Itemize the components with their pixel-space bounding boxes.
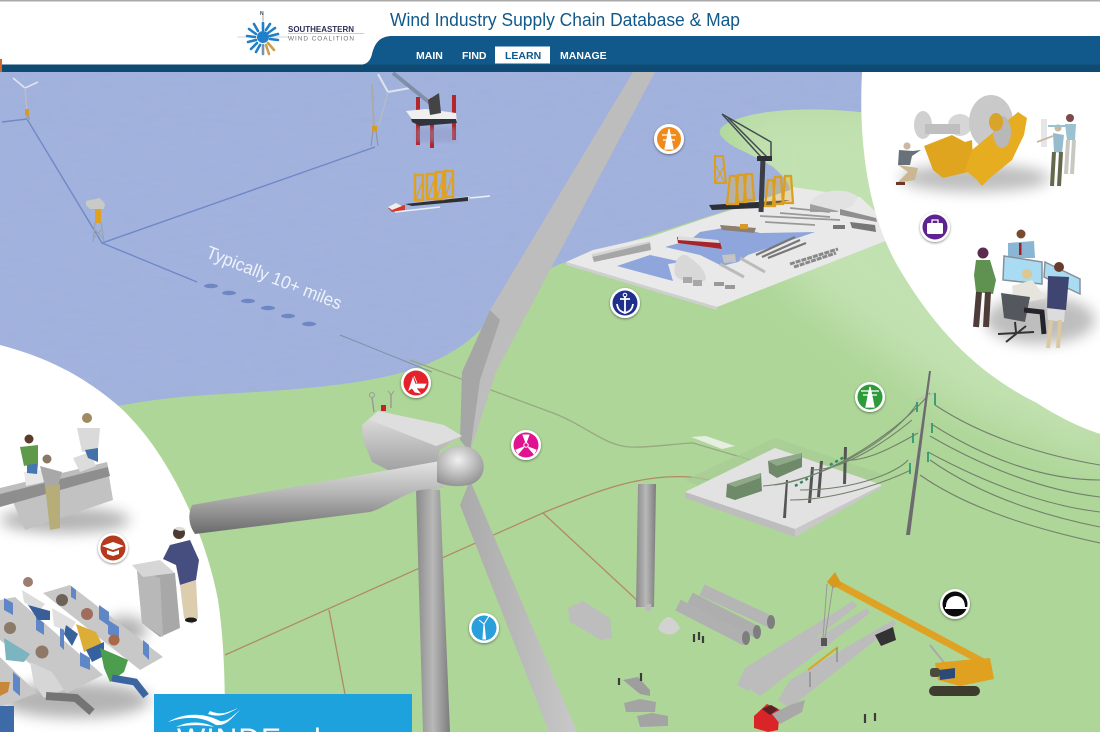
icon: blue turbine	[469, 613, 499, 643]
classroom students	[0, 577, 146, 732]
distance label: Typically 10+ miles	[204, 242, 345, 313]
hub	[437, 446, 484, 486]
tower sections on ground	[678, 590, 771, 640]
logo: wordmark	[288, 24, 364, 42]
icon: black hard hat	[940, 589, 970, 619]
panel: left white area	[0, 345, 225, 732]
offshore substation platform	[86, 198, 105, 242]
nacelle	[362, 391, 462, 490]
icon: magenta rotor	[511, 430, 541, 460]
gearbox technicians	[896, 114, 1076, 186]
classroom laptops	[4, 586, 149, 696]
transmission lines and pole	[763, 371, 1100, 543]
crane	[808, 572, 994, 696]
navigation menu: FIND	[462, 50, 487, 62]
navigation menu	[416, 46, 607, 64]
turbine tower	[416, 488, 450, 732]
left panel floor shadows	[0, 507, 150, 718]
navigation menu: MAIN	[416, 50, 443, 62]
logo: sunburst	[238, 11, 289, 54]
hub on ground	[658, 617, 680, 635]
presenter	[163, 527, 199, 624]
classroom desks	[0, 585, 163, 707]
icon: purple briefcase	[920, 212, 950, 242]
land east	[860, 250, 1100, 560]
nacelle on ground	[568, 601, 612, 640]
panel: right white area	[861, 72, 1100, 434]
office workers and monitors	[974, 230, 1080, 348]
rear trailer	[875, 627, 896, 646]
jack-up rig	[393, 73, 457, 148]
logo: wordmark: SOUTHEASTERN	[288, 24, 354, 34]
banner wave logo	[168, 708, 240, 727]
offshore cable routes	[2, 119, 432, 372]
upper land light area	[730, 100, 1100, 470]
navigation menu: MANAGE	[560, 50, 607, 62]
navigation menu: LEARN	[505, 50, 541, 62]
brown cable lines	[225, 360, 768, 694]
icon: green pylon	[855, 382, 885, 412]
blades on ground	[737, 601, 896, 708]
offshore turbine near rig	[371, 74, 410, 146]
classroom podium	[132, 560, 180, 637]
land centre	[480, 100, 900, 560]
lab people	[20, 413, 100, 530]
icon: red nacelle	[401, 368, 431, 398]
main turbine	[189, 72, 655, 732]
land west	[90, 260, 510, 560]
offshore turbine left	[13, 78, 38, 120]
lab bench	[0, 452, 113, 530]
gearbox machine	[914, 95, 1027, 186]
harbor basins	[617, 226, 815, 281]
logo: wordmark: WIND COALITION	[288, 36, 354, 42]
tower section ends	[742, 615, 775, 645]
lower blade	[460, 480, 577, 732]
harbor crane and jackets	[709, 114, 793, 212]
land south centre	[540, 520, 830, 732]
right panel floor shadows	[900, 164, 1095, 344]
page edge	[0, 725, 1, 726]
panel: header	[0, 0, 1100, 72]
panel: sea	[0, 72, 870, 412]
left blade	[189, 461, 446, 534]
truck	[754, 700, 805, 732]
icon: orange tower	[654, 124, 684, 154]
buried cable dashes	[204, 284, 316, 326]
icon: brown graduation cap	[98, 533, 128, 563]
panel: WINDExchange banner	[154, 694, 412, 732]
header title: Wind Industry Supply Chain Database & Map	[390, 10, 740, 30]
logo: sunburst: N	[260, 11, 264, 17]
substation	[685, 436, 882, 537]
land south west	[190, 540, 560, 732]
upper blade	[460, 72, 655, 452]
harbor buildings and ships	[592, 191, 877, 289]
standing tower section	[636, 484, 656, 611]
harbor quay	[566, 187, 888, 310]
pickup trucks and workers	[619, 632, 875, 727]
icon: navy anchor	[610, 288, 640, 318]
jacket transport vessel	[388, 171, 490, 212]
land south east	[810, 540, 1100, 732]
